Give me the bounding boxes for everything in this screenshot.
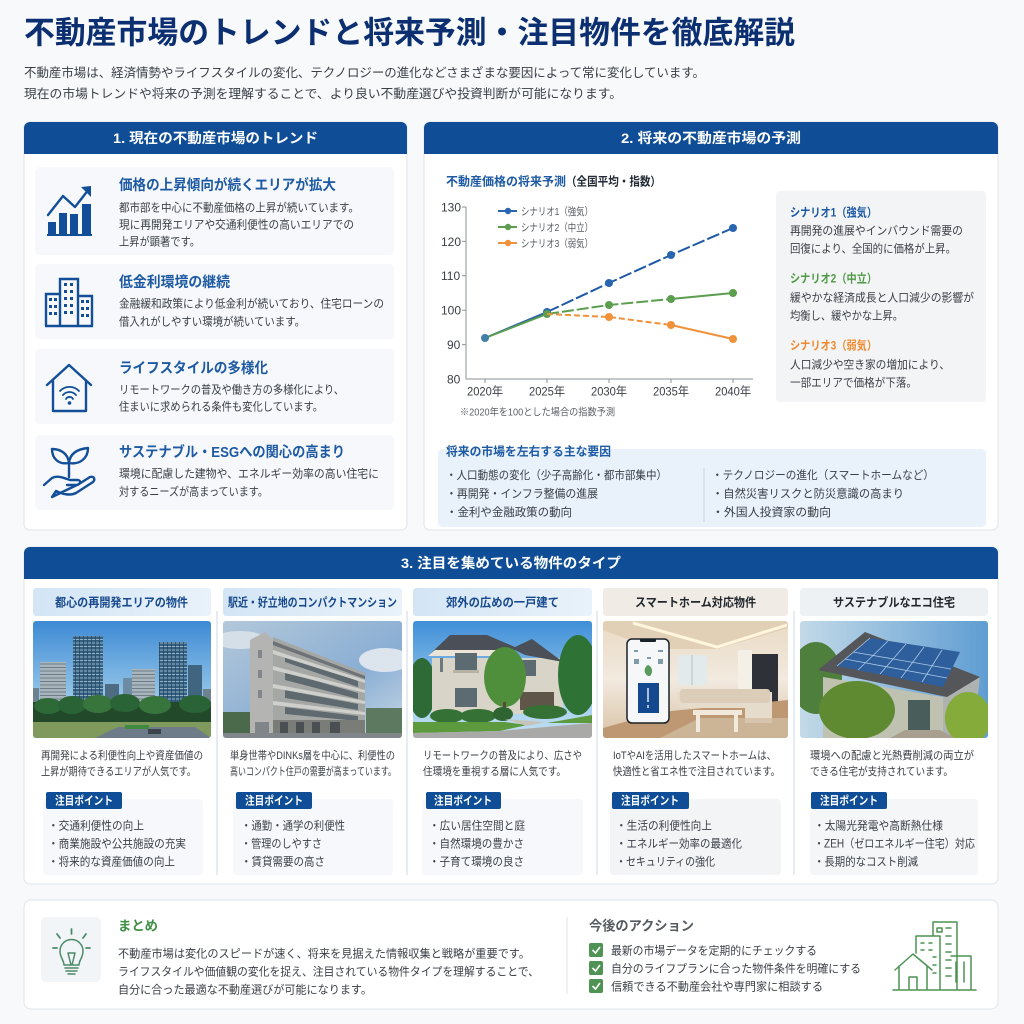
scenario 2 text: シナリオ2（中立） bbox=[790, 270, 877, 286]
icon: light bulb bbox=[41, 917, 101, 982]
key points: ・長期的なコスト削減 bbox=[814, 854, 918, 868]
panel heading: future forecast: 2. 将来の不動産市場の予測 bbox=[621, 130, 801, 146]
property card: eco house bbox=[790, 588, 991, 875]
scenario 2 text: 緩やかな経済成長と人口減少の影響が bbox=[790, 290, 974, 304]
trend item: low interest rates: 借入れがしやすい環境が続いています。 bbox=[119, 314, 305, 328]
property card: suburban house: 住環境を重視する層に人気です。 bbox=[423, 764, 566, 778]
photo: apartment building bbox=[214, 621, 411, 738]
scenario descriptions bbox=[776, 191, 986, 402]
property card: compact condominium bbox=[214, 588, 411, 875]
key points bbox=[610, 792, 781, 875]
property card: eco house: 環境への配慮と光熱費削減の両立が bbox=[810, 748, 974, 762]
key factors box: 将来の市場を左右する主な要因 bbox=[446, 444, 611, 458]
icon: smart home bbox=[47, 365, 91, 411]
trend item: rising prices: 上昇が顕著です。 bbox=[119, 234, 200, 248]
line chart: price index forecast: 120 bbox=[441, 235, 461, 249]
phone bbox=[627, 639, 669, 723]
key points: ・セキュリティの強化 bbox=[616, 856, 715, 868]
panel heading: property types bbox=[24, 547, 998, 579]
trend item: diversifying lifestyles bbox=[35, 349, 394, 424]
trend item: sustainability and ESG bbox=[35, 435, 394, 510]
photo: smart living room bbox=[603, 621, 788, 738]
icon: buildings bbox=[45, 279, 93, 326]
series: scenario 3 bbox=[547, 313, 737, 343]
trend item: diversifying lifestyles: ライフスタイルの多様化 bbox=[119, 359, 268, 377]
next actions: 今後のアクション bbox=[589, 918, 694, 934]
key points bbox=[422, 792, 583, 875]
summary text bbox=[118, 918, 539, 996]
scenario 3 text: 一部エリアで価格が下落。 bbox=[790, 376, 917, 390]
panel: summary and actions bbox=[24, 900, 998, 1009]
panel heading: property types: 3. 注目を集めている物件のタイプ bbox=[401, 555, 621, 571]
key points: ・太陽光発電や高断熱仕様 bbox=[814, 818, 943, 832]
scenario 1 text: 再開発の進展やインバウンド需要の bbox=[790, 224, 963, 238]
key factors box: ・人口動態の変化（少子高齢化・都市部集中） bbox=[446, 468, 667, 482]
panel heading: future forecast bbox=[424, 122, 998, 154]
action 1: 最新の市場データを定期的にチェックする bbox=[611, 944, 817, 958]
line chart: price index forecast: 80 bbox=[447, 372, 461, 386]
summary text: 自分に合った最適な不動産選びが可能になります。 bbox=[118, 982, 372, 996]
scenario 3 text: 人口減少や空き家の増加により、 bbox=[790, 358, 950, 372]
trend item: diversifying lifestyles: 住まいに求められる条件も変化しています。 bbox=[119, 400, 323, 414]
photo: detached house bbox=[408, 621, 598, 738]
property card: eco house: サステナブルなエコ住宅 bbox=[833, 594, 955, 610]
scenario 2 text: 均衡し、緩やかな上昇。 bbox=[790, 308, 903, 322]
trend item: low interest rates: 低金利環境の継続 bbox=[119, 273, 230, 291]
action 3: 信頼できる不動産会社や専門家に相談する bbox=[611, 980, 823, 994]
property card: smart home: IoTやAIを活用したスマートホームは、 bbox=[613, 749, 776, 762]
property card: compact condominium: 駅近・好立地のコンパクトマンション bbox=[228, 594, 397, 610]
key points: ・生活の利便性向上 bbox=[616, 818, 712, 832]
key factors box: ・自然災害リスクと防災意識の高まり bbox=[712, 486, 904, 500]
panel: current trends bbox=[24, 122, 407, 530]
chart title: （全国平均・指数） bbox=[566, 174, 661, 188]
chart legend: シナリオ2（中立） bbox=[521, 221, 593, 234]
panel: future forecast bbox=[424, 122, 998, 530]
property card: suburban house: リモートワークの普及により、広さや bbox=[423, 748, 582, 762]
trend item: sustainability and ESG: サステナブル・ESGへの関心の高まり bbox=[119, 443, 345, 461]
key points bbox=[810, 792, 978, 875]
key points: ・商業施設や公共施設の充実 bbox=[48, 838, 186, 850]
line chart: price index forecast: 130 bbox=[441, 200, 461, 214]
key points: 注目ポイント bbox=[245, 794, 303, 808]
scenario 1 text bbox=[790, 204, 963, 256]
property card: suburban house: 郊外の広めの一戸建て bbox=[446, 594, 559, 610]
property card: smart home: スマートホーム対応物件 bbox=[635, 594, 756, 610]
property card: urban redevelopment: 上昇が期待できるエリアが人気です。 bbox=[41, 764, 196, 778]
key points: 注目ポイント bbox=[55, 794, 113, 808]
series: scenario 1 bbox=[485, 224, 737, 338]
property card: smart home: 快適性と省エネ性で注目されています。 bbox=[613, 764, 780, 778]
chart legend: シナリオ3（弱気） bbox=[521, 237, 593, 250]
key points: ・将来的な資産価値の向上 bbox=[48, 854, 175, 868]
key factors box: ・再開発・インフラ整備の進展 bbox=[446, 486, 598, 500]
key points: 注目ポイント bbox=[621, 794, 679, 808]
chart legend: シナリオ1（強気） bbox=[521, 205, 593, 218]
scenario 3 text: シナリオ3（弱気） bbox=[790, 338, 877, 352]
property card: smart home bbox=[603, 588, 788, 875]
trend item: diversifying lifestyles: リモートワークの普及や働き方の多様化により、 bbox=[119, 382, 344, 396]
property card: urban redevelopment: 再開発による利便性向上や資産価値の bbox=[41, 748, 203, 762]
panel: property types bbox=[24, 547, 998, 884]
key points: ・通勤・通学の利便性 bbox=[241, 818, 345, 832]
key points: ・管理のしやすさ bbox=[241, 836, 322, 850]
trend item: sustainability and ESG: 環境に配慮した建物や、エネルギー効率の高い住宅に bbox=[119, 466, 379, 480]
trend item: rising prices: 価格の上昇傾向が続くエリアが拡大 bbox=[119, 176, 336, 194]
trend item: rising prices: 都市部を中心に不動産価格の上昇が続いています。 bbox=[119, 200, 359, 214]
key points: ・賃貸需要の高さ bbox=[241, 854, 325, 868]
key points bbox=[233, 792, 393, 875]
line chart: price index forecast: 2035年 bbox=[653, 384, 689, 398]
title: 不動産市場のトレンドと将来予測・注目物件を徹底解説 bbox=[24, 16, 795, 50]
chart legend bbox=[498, 205, 593, 250]
property card: urban redevelopment: 都心の再開発エリアの物件 bbox=[55, 594, 188, 610]
trend item: rising prices bbox=[35, 167, 394, 255]
scenario 1 text: シナリオ1（強気） bbox=[790, 204, 877, 220]
scenario 1 text: 回復により、全国的に価格が上昇。 bbox=[790, 242, 956, 256]
property card: urban redevelopment bbox=[33, 588, 211, 875]
key points: 注目ポイント bbox=[434, 794, 492, 808]
intro text bbox=[24, 65, 705, 101]
photo: high-rise towers bbox=[33, 621, 211, 738]
series: scenario 2 bbox=[481, 289, 737, 342]
summary text: 不動産市場は変化のスピードが速く、将来を見据えた情報収集と戦略が重要です。 bbox=[118, 946, 530, 960]
key points: ・交通利便性の向上 bbox=[48, 818, 144, 832]
next actions bbox=[589, 918, 861, 994]
intro text: 現在の市場トレンドや将来の予測を理解することで、より良い不動産選びや投資判断が可能になります。 bbox=[24, 86, 622, 101]
key factors box bbox=[438, 444, 986, 527]
trend item: sustainability and ESG: 対するニーズが高まっています。 bbox=[119, 484, 268, 498]
icon: rising chart bbox=[47, 186, 92, 236]
summary text: ライフスタイルや価値観の変化を捉え、注目されている物件タイプを理解することで、 bbox=[118, 964, 539, 978]
line chart: price index forecast: 90 bbox=[447, 338, 461, 352]
key points: 注目ポイント bbox=[820, 794, 878, 808]
photo: solar-panel house bbox=[800, 621, 988, 738]
line chart: price index forecast: 110 bbox=[441, 269, 460, 283]
chart footnote: ※2020年を100とした場合の指数予測 bbox=[460, 406, 615, 418]
key points: ・エネルギー効率の最適化 bbox=[616, 836, 742, 850]
intro text: 不動産市場は、経済情勢やライフスタイルの変化、テクノロジーの進化などさまざまな要因によって常に変化しています。 bbox=[24, 65, 705, 80]
panel heading: current trends bbox=[24, 122, 407, 154]
scenario 3 text bbox=[790, 338, 950, 390]
trend item: low interest rates bbox=[35, 264, 394, 339]
key points: ・ZEH（ゼロエネルギー住宅）対応 bbox=[814, 836, 975, 850]
line chart: price index forecast: 2025年 bbox=[529, 384, 565, 398]
trend item: low interest rates: 金融緩和政策により低金利が続いており、住宅ローンの bbox=[119, 296, 384, 310]
line chart: price index forecast bbox=[441, 200, 753, 398]
chart title: 不動産価格の将来予測 bbox=[446, 174, 566, 188]
line chart: price index forecast: 2040年 bbox=[715, 384, 751, 398]
key points: ・広い居住空間と庭 bbox=[429, 818, 525, 832]
line chart: price index forecast: 2030年 bbox=[591, 384, 627, 398]
key points bbox=[43, 792, 203, 875]
key factors box: ・外国人投資家の動向 bbox=[712, 505, 831, 519]
key factors box: ・テクノロジーの進化（スマートホームなど） bbox=[712, 469, 934, 482]
icon: plant on hand bbox=[44, 448, 94, 497]
key points: ・子育て環境の良さ bbox=[429, 856, 524, 868]
summary text: まとめ bbox=[118, 918, 158, 934]
property card: suburban house bbox=[408, 588, 598, 875]
action 2: 自分のライフプランに合った物件条件を明確にする bbox=[611, 962, 861, 976]
line chart: price index forecast: 2020年 bbox=[467, 384, 503, 398]
property card: compact condominium: 単身世帯やDINKs層を中心に、利便性の bbox=[230, 748, 395, 762]
trend item: rising prices: 現に再開発エリアや交通利便性の高いエリアでの bbox=[119, 218, 354, 232]
line chart: price index forecast: 100 bbox=[441, 304, 461, 318]
key points: ・自然環境の豊かさ bbox=[429, 836, 524, 850]
property card: eco house: できる住宅が支持されています。 bbox=[810, 764, 953, 778]
property card: compact condominium: 高いコンパクト住戸の需要が高まっています。 bbox=[230, 764, 396, 778]
key factors box: ・金利や金融政策の動向 bbox=[446, 505, 572, 519]
chart title bbox=[446, 174, 661, 188]
panel heading: current trends: 1. 現在の不動産市場のトレンド bbox=[113, 130, 318, 146]
icon: city and house bbox=[893, 922, 976, 990]
scenario 2 text bbox=[790, 270, 974, 322]
